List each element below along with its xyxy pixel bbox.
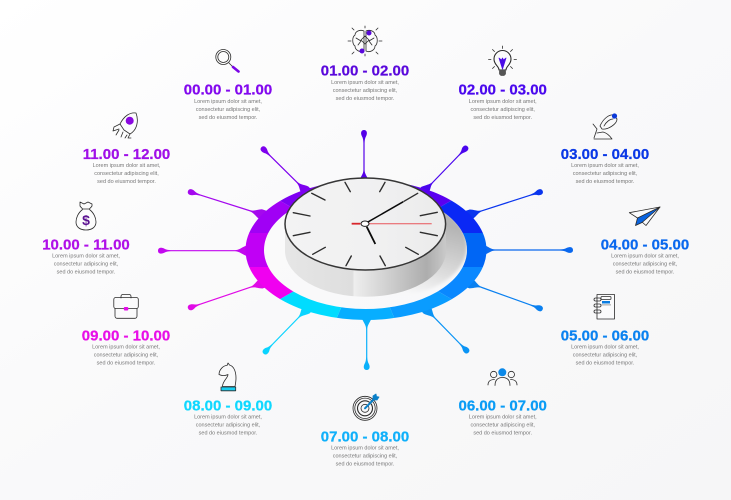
heading: 06.00 - 07.00 bbox=[458, 398, 547, 414]
icon: notebook bbox=[594, 294, 614, 319]
text block: Lorem ipsum dolor sit amet, bbox=[331, 446, 399, 452]
text block: Lorem ipsum dolor sit amet, bbox=[194, 99, 262, 105]
text block: consectetur adipiscing elit, bbox=[333, 454, 398, 460]
item 07.00 bbox=[321, 394, 409, 468]
item 11.00 bbox=[83, 113, 170, 185]
text block: sed do eiusmod tempor. bbox=[97, 360, 156, 366]
spoke 07.00 bbox=[362, 312, 372, 370]
clock ticks bbox=[293, 182, 437, 266]
heading: 07.00 - 08.00 bbox=[321, 428, 409, 446]
text block: sed do eiusmod tempor. bbox=[199, 115, 258, 121]
icon: brain bbox=[348, 26, 382, 56]
spoke 09.00 bbox=[186, 277, 268, 313]
spokes bbox=[158, 130, 573, 370]
item 08.00 bbox=[184, 363, 272, 436]
item 09.00 bbox=[82, 294, 170, 366]
heading: 08.00 - 09.00 bbox=[184, 398, 272, 414]
heading: 00.00 - 01.00 bbox=[184, 82, 272, 98]
text block: consectetur adipiscing elit, bbox=[573, 171, 638, 177]
item 05.00 bbox=[561, 294, 649, 366]
text block: consectetur adipiscing elit, bbox=[470, 422, 535, 428]
clock face bbox=[285, 178, 446, 270]
icon: telescope bbox=[593, 113, 617, 139]
icon: light bulb bbox=[488, 46, 516, 76]
clock pivot bbox=[361, 221, 369, 226]
spoke 05.00 bbox=[464, 277, 544, 314]
text block: consectetur adipiscing elit, bbox=[94, 171, 159, 177]
item 00.00 bbox=[184, 50, 272, 121]
text block: Lorem ipsum dolor sit amet, bbox=[571, 344, 639, 350]
text block: Lorem ipsum dolor sit amet, bbox=[469, 99, 537, 105]
heading: 03.00 - 04.00 bbox=[561, 146, 649, 163]
icon: paper plane bbox=[629, 207, 660, 226]
heading: 05.00 - 06.00 bbox=[561, 328, 649, 344]
text block: Lorem ipsum dolor sit amet, bbox=[331, 80, 399, 86]
text block: sed do eiusmod tempor. bbox=[473, 430, 533, 436]
text block: consectetur adipiscing elit, bbox=[54, 262, 119, 268]
text block: Lorem ipsum dolor sit amet, bbox=[611, 254, 679, 260]
heading: 01.00 - 02.00 bbox=[321, 62, 409, 80]
ring segments bbox=[246, 184, 486, 320]
icon: money bag: $ bbox=[82, 212, 90, 228]
clock body bbox=[285, 224, 446, 297]
second hand bbox=[352, 223, 432, 225]
icon: people bbox=[488, 368, 517, 386]
heading: 10.00 - 11.00 bbox=[42, 236, 130, 254]
spoke 02.00 bbox=[417, 143, 471, 198]
text block: Lorem ipsum dolor sit amet, bbox=[194, 414, 262, 420]
hour hand bbox=[367, 227, 375, 244]
item 03.00 bbox=[561, 113, 649, 185]
spoke 06.00 bbox=[420, 302, 472, 356]
icon: magnifier bbox=[216, 50, 238, 72]
text block: sed do eiusmod tempor. bbox=[57, 270, 116, 276]
item 06.00 bbox=[458, 368, 547, 436]
heading: 09.00 - 10.00 bbox=[82, 328, 170, 344]
spoke 00.00 bbox=[258, 144, 313, 198]
clock bbox=[285, 178, 446, 297]
spoke 04.00 bbox=[478, 245, 573, 255]
spoke 10.00 bbox=[158, 246, 252, 256]
text block: Lorem ipsum dolor sit amet, bbox=[52, 254, 120, 260]
text block: sed do eiusmod tempor. bbox=[616, 270, 675, 276]
text block: consectetur adipiscing elit, bbox=[573, 352, 638, 358]
spoke 11.00 bbox=[186, 186, 268, 221]
text block: consectetur adipiscing elit, bbox=[94, 352, 159, 358]
text block: consectetur adipiscing elit, bbox=[470, 107, 535, 113]
text block: Lorem ipsum dolor sit amet, bbox=[571, 163, 639, 169]
text block: Lorem ipsum dolor sit amet, bbox=[92, 344, 160, 350]
text block: sed do eiusmod tempor. bbox=[97, 179, 156, 185]
text block: consectetur adipiscing elit, bbox=[333, 88, 398, 94]
item 04.00 bbox=[601, 207, 689, 276]
text block: sed do eiusmod tempor. bbox=[336, 96, 395, 102]
icon: target bbox=[353, 394, 379, 420]
text block: sed do eiusmod tempor. bbox=[473, 115, 533, 121]
item 01.00 bbox=[321, 26, 409, 102]
text block: sed do eiusmod tempor. bbox=[199, 430, 258, 436]
text block: sed do eiusmod tempor. bbox=[576, 360, 635, 366]
icon: briefcase bbox=[114, 294, 138, 318]
icon: chess knight bbox=[219, 363, 236, 391]
minute hand bbox=[365, 202, 403, 224]
text block: consectetur adipiscing elit, bbox=[613, 262, 678, 268]
spoke 01.00 bbox=[359, 130, 369, 187]
spoke 08.00 bbox=[260, 302, 314, 357]
text block: Lorem ipsum dolor sit amet, bbox=[469, 414, 537, 420]
heading: 02.00 - 03.00 bbox=[458, 82, 547, 98]
heading: 11.00 - 12.00 bbox=[83, 146, 170, 163]
text block: Lorem ipsum dolor sit amet, bbox=[93, 163, 161, 169]
text block: consectetur adipiscing elit, bbox=[196, 422, 261, 428]
item 02.00 bbox=[458, 46, 547, 121]
icon: rocket bbox=[113, 113, 137, 138]
text block: sed do eiusmod tempor. bbox=[576, 179, 635, 185]
spoke 03.00 bbox=[464, 186, 544, 221]
item 10.00 bbox=[42, 202, 130, 276]
clock shadow bbox=[416, 212, 467, 289]
heading: 04.00 - 05.00 bbox=[601, 236, 689, 254]
text block: consectetur adipiscing elit, bbox=[196, 107, 261, 113]
text block: sed do eiusmod tempor. bbox=[336, 462, 395, 468]
